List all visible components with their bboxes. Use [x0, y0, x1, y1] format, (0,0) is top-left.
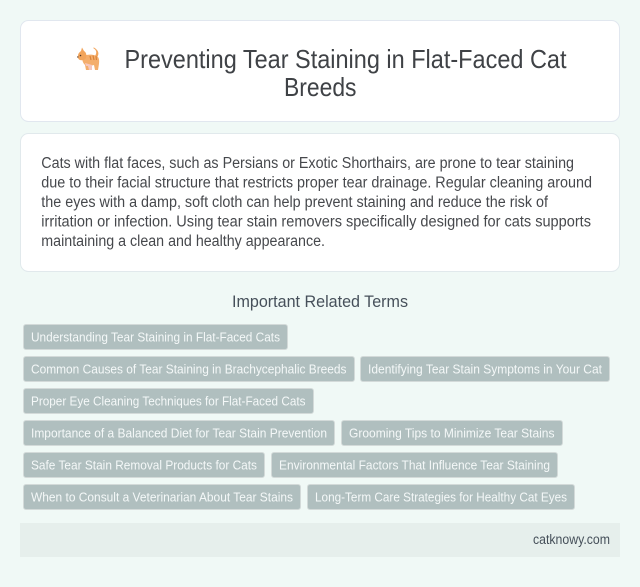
tag	[24, 420, 334, 446]
tag	[342, 420, 562, 446]
text block: description: Cats with flat faces, such as Persians or Exotic Shorthairs, are prone to tear staining	[41, 155, 574, 172]
tag: Safe Tear Stain Removal Products for Cats	[31, 458, 257, 472]
panel: header	[20, 20, 620, 122]
tag	[24, 324, 288, 350]
text block: description: due to their facial structure that restricts proper tear drainage. Regular cleaning around	[41, 174, 592, 191]
tag: When to Consult a Veterinarian About Tear Stains	[31, 490, 293, 504]
tag: Grooming Tips to Minimize Tear Stains	[349, 426, 555, 440]
tag: Environmental Factors That Influence Tear Staining	[279, 458, 550, 472]
tag: Understanding Tear Staining in Flat-Faced Cats	[31, 330, 280, 344]
tag: Long-Term Care Strategies for Healthy Cat Eyes	[315, 490, 567, 504]
tag: Identifying Tear Stain Symptoms in Your Cat	[368, 362, 602, 376]
footer	[20, 523, 620, 557]
heading: related terms: Important Related Terms	[232, 292, 408, 311]
icon: cat	[77, 48, 99, 70]
text block: description: irritation or infection. Using tear stain removers specifically designed for cats supports	[41, 213, 591, 230]
footer source text: catknowy.com	[533, 532, 610, 547]
tag	[360, 356, 610, 382]
title: Preventing Tear Staining in Flat-Faced Cat	[124, 44, 567, 74]
tag	[24, 452, 264, 478]
text block: description	[41, 155, 592, 250]
tag	[24, 356, 354, 382]
tag: Importance of a Balanced Diet for Tear Stain Prevention	[31, 426, 327, 440]
tag	[24, 484, 300, 510]
text block: description: maintaining a clean and healthy appearance.	[41, 233, 325, 250]
tag: Common Causes of Tear Staining in Brachycephalic Breeds	[31, 362, 347, 376]
tag: Proper Eye Cleaning Techniques for Flat-Faced Cats	[31, 394, 306, 408]
tag	[272, 452, 558, 478]
title	[124, 44, 567, 102]
panel: related term tags	[24, 324, 610, 510]
panel: description	[20, 134, 620, 272]
tag	[308, 484, 574, 510]
text block: description: the eyes with a damp, soft cloth can help prevent staining and reduce the risk of	[41, 194, 549, 211]
tag	[24, 388, 314, 414]
title: Breeds	[284, 72, 356, 102]
